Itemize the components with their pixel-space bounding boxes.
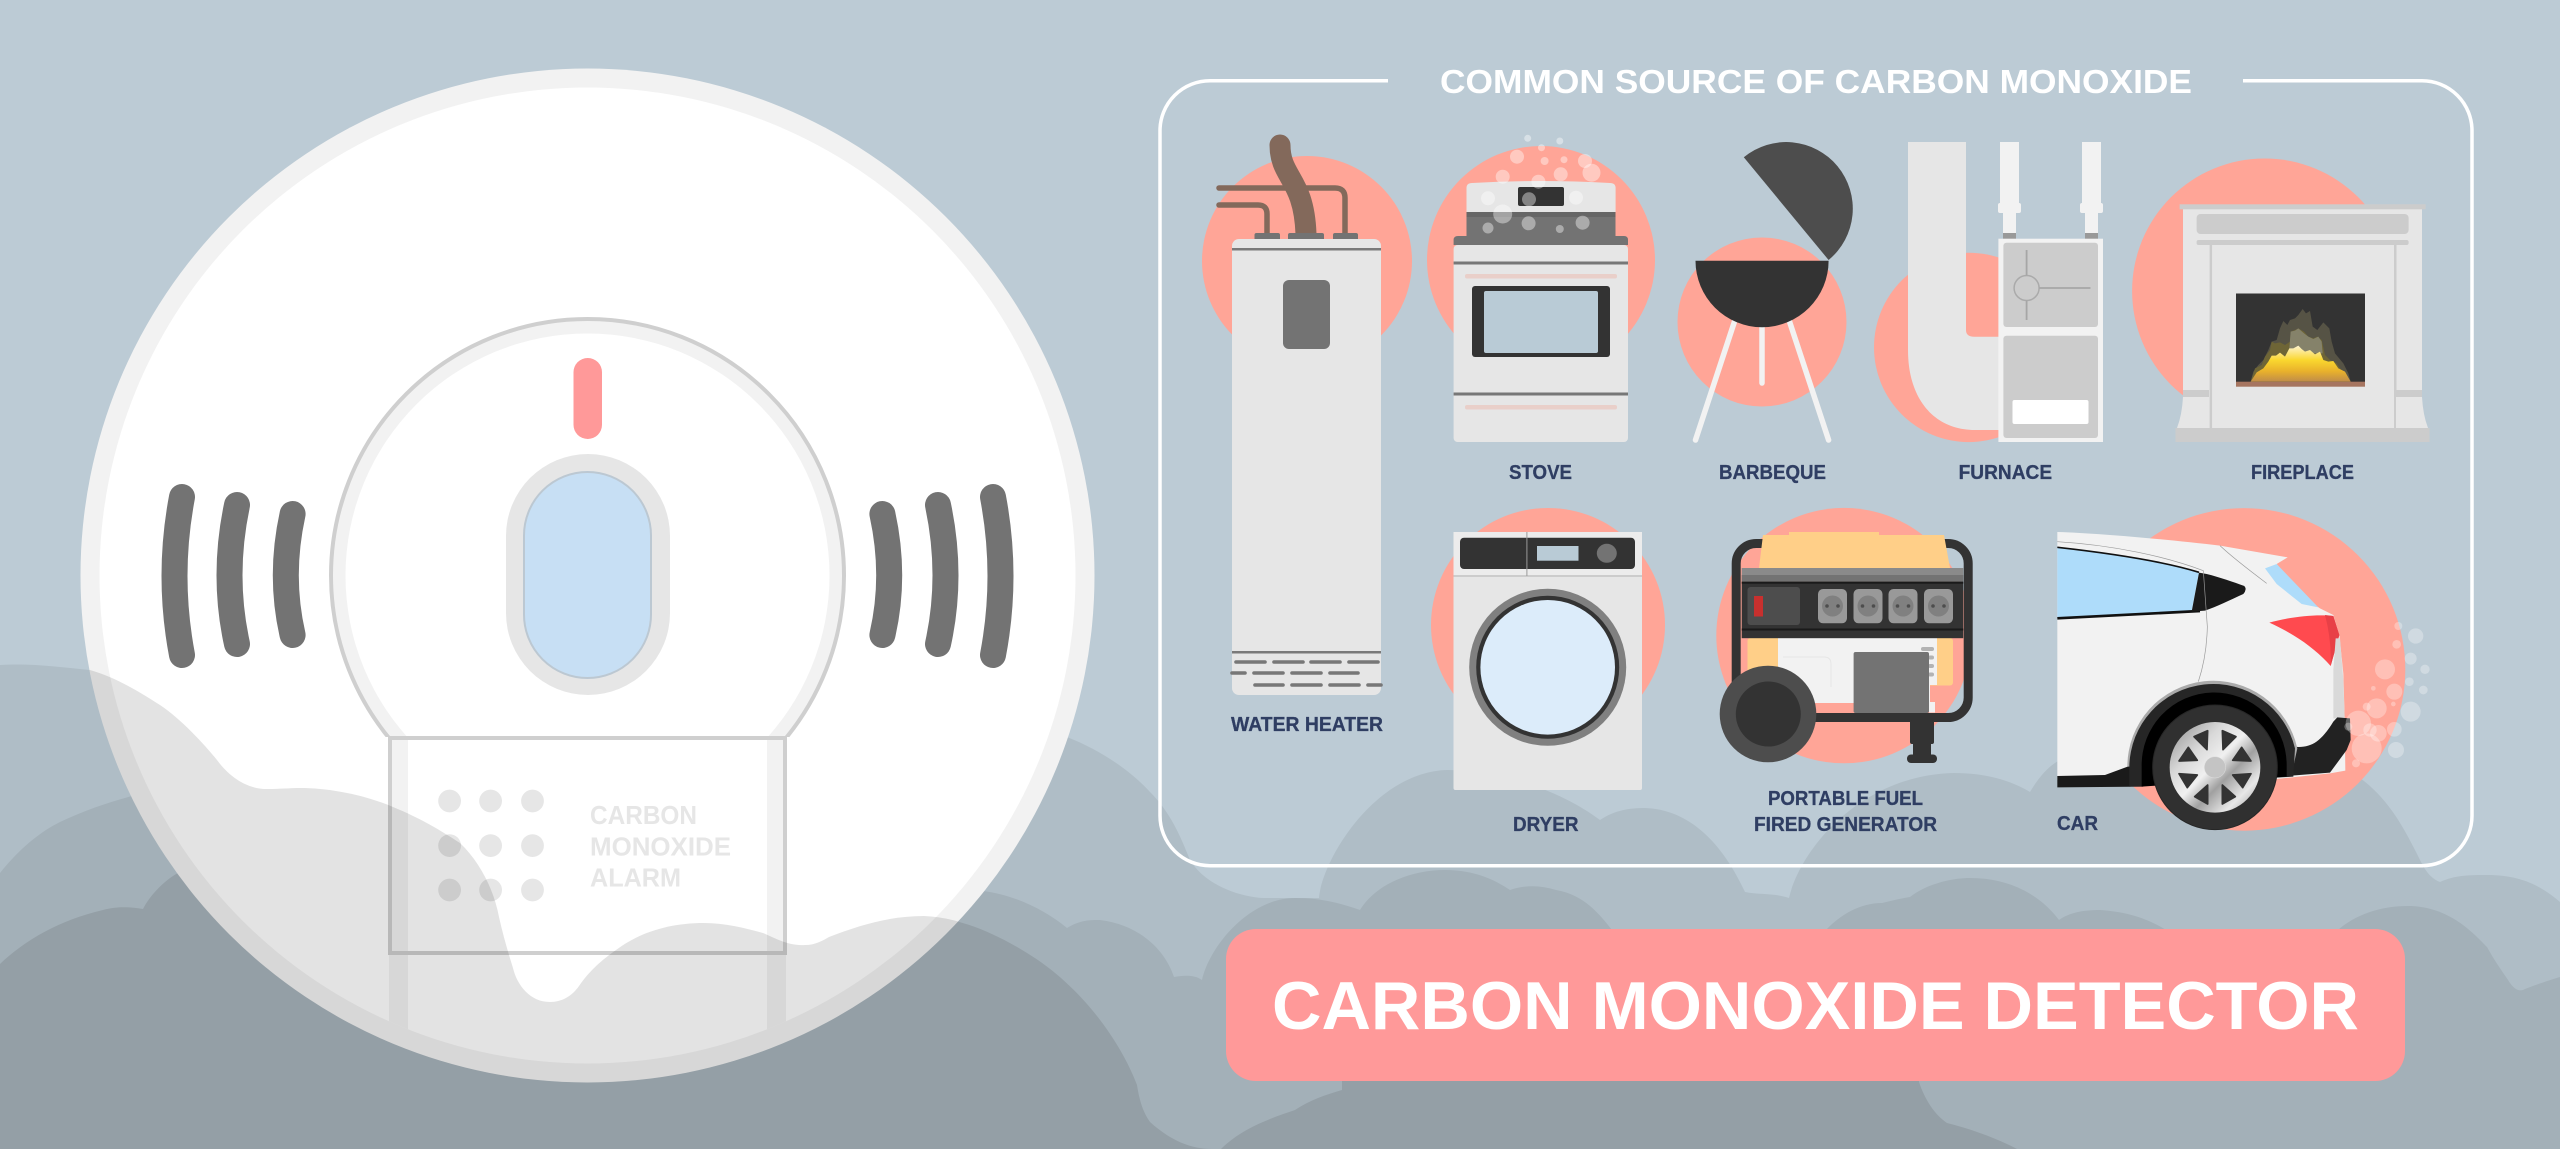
backdrop circle bbox=[1678, 238, 1846, 406]
dryer body bbox=[1454, 532, 1642, 790]
title banner bbox=[1226, 929, 2405, 1081]
smoke layer: dark right bbox=[1221, 1050, 2017, 1149]
vent pipes bbox=[1998, 142, 2103, 239]
furnace upper panel bbox=[2003, 243, 2098, 327]
label: FURNACE bbox=[1959, 462, 2052, 484]
vent strips bbox=[389, 737, 786, 1057]
oven door bbox=[1472, 286, 1610, 357]
side window bbox=[2057, 548, 2199, 617]
label bbox=[1754, 788, 1938, 836]
control panel bbox=[1742, 582, 1963, 638]
tank details bbox=[1232, 248, 1381, 685]
pipe fittings bbox=[1254, 233, 1358, 241]
backdrop circle bbox=[2083, 508, 2405, 831]
backdrop circle bbox=[2132, 158, 2397, 424]
detector face bbox=[100, 88, 1076, 1064]
sound waves right bbox=[882, 497, 1000, 655]
label: CAR bbox=[2057, 813, 2099, 835]
window trim bbox=[2057, 547, 2199, 572]
label: DRYER bbox=[1513, 814, 1579, 836]
tank body bbox=[1232, 239, 1381, 695]
mantel body bbox=[2183, 209, 2422, 428]
source: portable generator bbox=[1716, 508, 1972, 836]
label: STOVE bbox=[1509, 462, 1572, 484]
rear window bbox=[2265, 564, 2318, 607]
label: WATER HEATER bbox=[1231, 714, 1384, 736]
flue pipe bbox=[1280, 145, 1306, 234]
wheel arch bbox=[2127, 681, 2297, 787]
detector inner dome bbox=[329, 317, 846, 737]
label: BARBEQUE bbox=[1719, 462, 1826, 484]
car drawing bbox=[2057, 532, 2430, 830]
firebox bbox=[2236, 294, 2365, 387]
speaker dots bbox=[438, 790, 544, 901]
mantel feet bbox=[2177, 397, 2428, 428]
source: stove bbox=[1427, 135, 1655, 484]
generator frame bbox=[1736, 544, 1968, 718]
backdrop circle bbox=[1874, 253, 2063, 442]
tank strip bbox=[1742, 568, 1963, 582]
stove top bbox=[1454, 236, 1628, 245]
detector text: MONOXIDE bbox=[590, 832, 731, 862]
detector text: CARBON bbox=[590, 800, 697, 830]
smoke layer: light bbox=[0, 664, 2560, 1149]
source: fireplace bbox=[2132, 158, 2430, 484]
taillight bbox=[2269, 615, 2339, 666]
stove lines and handles bbox=[1454, 262, 1628, 410]
backdrop circle bbox=[1716, 508, 1972, 763]
source: car bbox=[2057, 508, 2430, 835]
smoke layer: dark left bbox=[0, 850, 1212, 1149]
label: FIRED GENERATOR bbox=[1754, 814, 1938, 836]
sockets bbox=[1818, 589, 1953, 623]
panel heading: COMMON SOURCE OF CARBON MONOXIDE bbox=[1440, 63, 2192, 100]
smoke over detector bbox=[90, 670, 958, 1082]
panel: common sources frame bbox=[1160, 81, 2472, 866]
generator leg bbox=[1907, 720, 1937, 763]
sound waves left bbox=[174, 497, 293, 655]
source: furnace bbox=[1874, 142, 2103, 484]
backdrop circle bbox=[1431, 508, 1665, 742]
fuel tank bbox=[1759, 532, 1950, 568]
main title: CARBON MONOXIDE DETECTOR bbox=[1272, 968, 2359, 1044]
sensor window bbox=[506, 454, 670, 695]
grill bowl bbox=[1696, 261, 1829, 327]
detector text bbox=[590, 800, 731, 892]
grill legs bbox=[1696, 320, 1829, 440]
flames bbox=[2251, 309, 2351, 382]
duct bbox=[1908, 142, 2000, 430]
detector text: ALARM bbox=[590, 862, 681, 892]
source: barbeque bbox=[1678, 142, 1853, 484]
source: dryer bbox=[1431, 508, 1665, 836]
detector label box bbox=[390, 738, 785, 953]
exhaust bubbles bbox=[2344, 622, 2430, 767]
rear bumper bbox=[2287, 717, 2351, 776]
small pipes bbox=[1219, 188, 1345, 235]
pillar bbox=[2192, 573, 2246, 612]
car body bbox=[2057, 532, 2345, 780]
source: water heater bbox=[1202, 145, 1412, 736]
mantel details bbox=[2183, 214, 2422, 428]
hearth bbox=[2176, 428, 2430, 442]
wheel bbox=[2153, 705, 2277, 830]
label: FIREPLACE bbox=[2251, 462, 2354, 484]
grill lid bbox=[1744, 142, 1853, 260]
side sill bbox=[2057, 766, 2143, 787]
label: PORTABLE FUEL bbox=[1768, 788, 1923, 810]
furnace lower panel bbox=[2003, 336, 2098, 438]
mantel top bbox=[2180, 204, 2426, 209]
furnace cabinet bbox=[1998, 239, 2103, 442]
steam bubbles bbox=[1481, 135, 1600, 234]
smoke layer: medium bbox=[0, 796, 2560, 1149]
stove body bbox=[1454, 245, 1628, 442]
carbon monoxide detector bbox=[80, 68, 1094, 1082]
stove back bbox=[1466, 181, 1616, 236]
generator wheel bbox=[1720, 666, 1816, 762]
engine bbox=[1748, 638, 1953, 713]
dryer control band bbox=[1454, 532, 1642, 577]
rear panel bbox=[2333, 638, 2345, 718]
dryer door bbox=[1469, 589, 1626, 746]
indicator light bbox=[574, 358, 602, 439]
detector outer ring bbox=[80, 68, 1094, 1082]
body seams bbox=[2057, 542, 2267, 682]
backdrop circle bbox=[1202, 156, 1412, 366]
backdrop circle bbox=[1427, 146, 1655, 374]
